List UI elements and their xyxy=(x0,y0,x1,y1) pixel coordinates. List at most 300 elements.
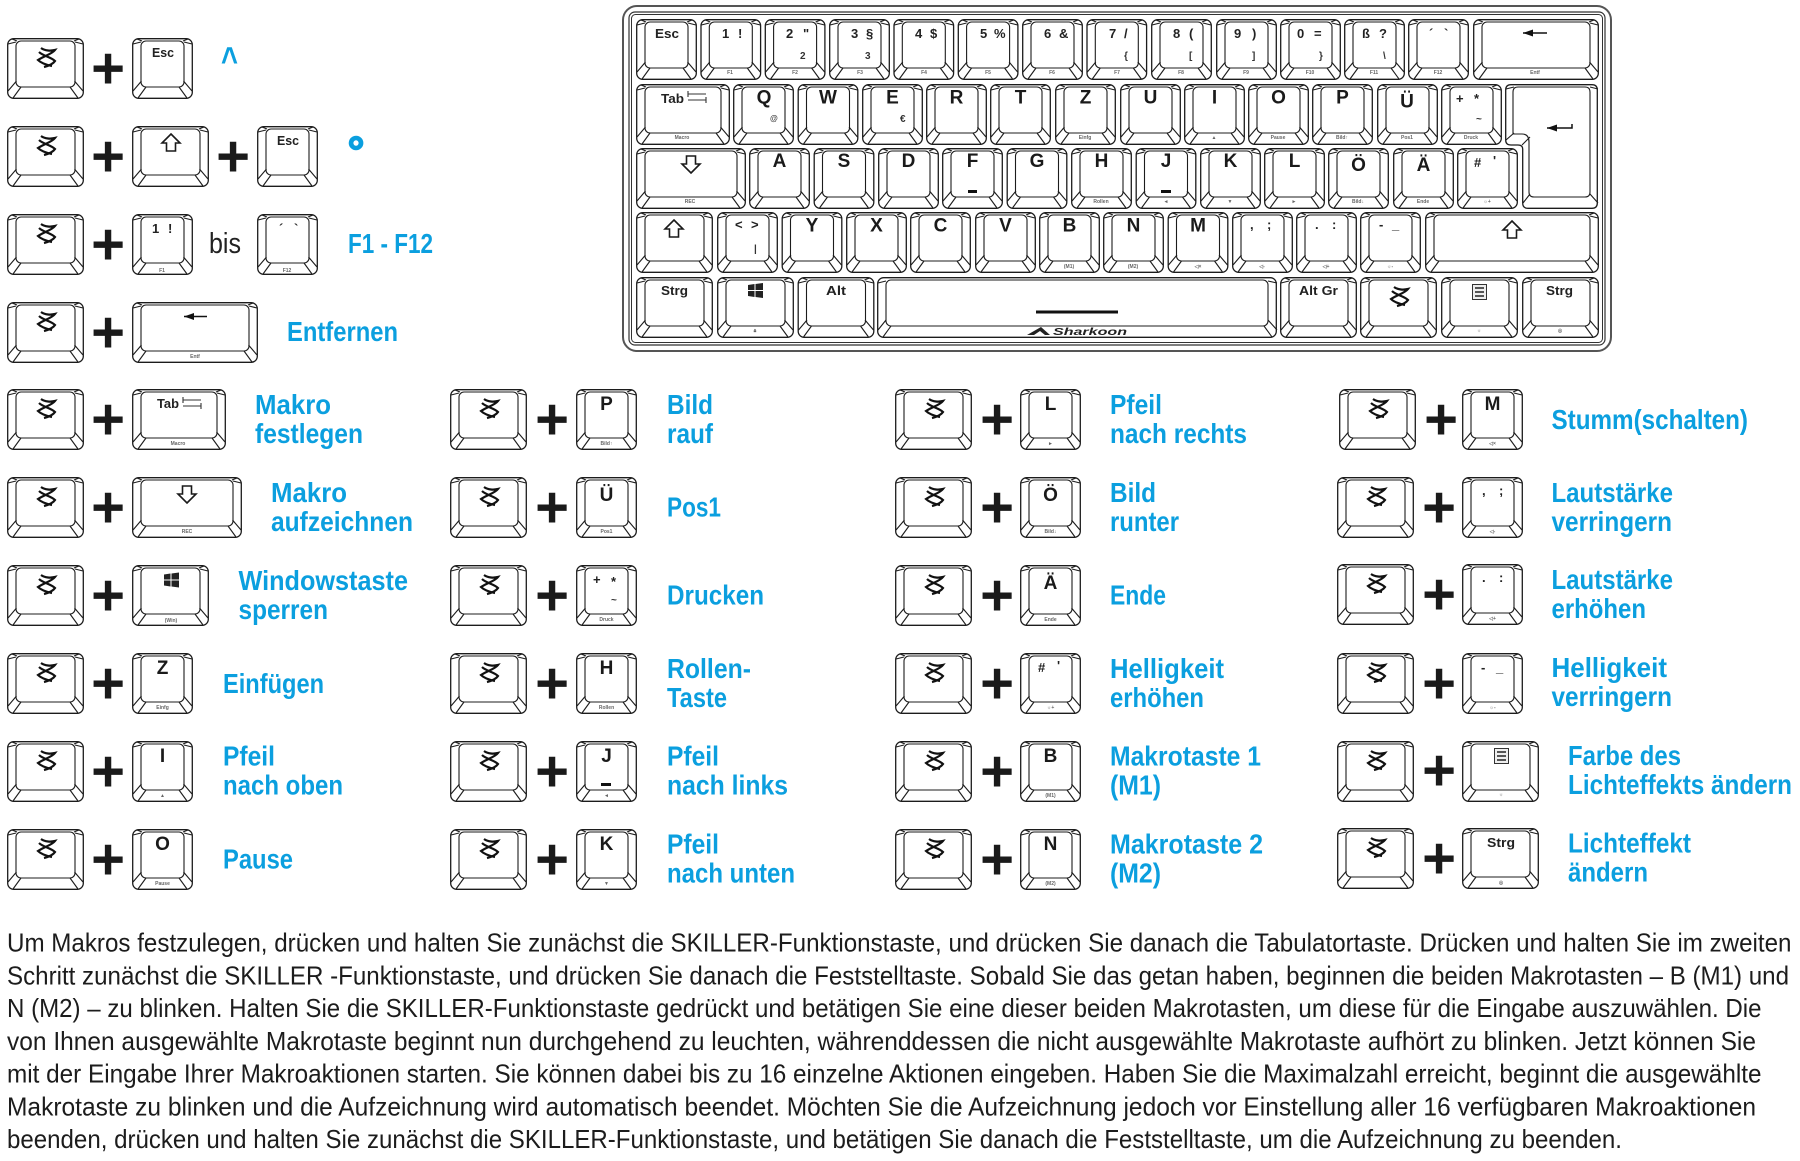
label: Windowstaste sperren: Windowstaste xyxy=(238,565,408,596)
shortcut: Einfügen xyxy=(8,651,324,716)
label: Pause: Pause xyxy=(223,844,293,874)
label: Helligkeit verringern xyxy=(1552,652,1672,712)
shortcut: Bild rauf: + xyxy=(535,387,569,452)
shortcut: F1 to F12: + xyxy=(91,212,125,277)
keyboard enter key xyxy=(1506,85,1598,208)
shortcut: Farbe des Lichteffekts ändern xyxy=(1338,738,1792,803)
keyboard row 3: ASDF keys: D xyxy=(902,151,915,172)
keyboard row 4: shift row: : xyxy=(1332,217,1336,232)
shortcut: Makrotaste 1: B xyxy=(1044,746,1057,767)
label: Lautstärke verringern xyxy=(1552,477,1673,537)
keyboard row 1: number keys xyxy=(637,20,1598,79)
shortcut: Lautstärke erhöhen: : xyxy=(1499,570,1503,585)
keyboard row 4: shift row: ◁- xyxy=(1258,264,1265,270)
keyboard row 3: ASDF keys: ☼+ xyxy=(1483,199,1491,205)
keyboard diagram xyxy=(623,6,1611,351)
shortcut: degree sign: Esc xyxy=(277,133,299,148)
keyboard row 1: number keys: 7 xyxy=(1109,26,1116,41)
keyboard row 1: number keys: = xyxy=(1314,26,1322,41)
label: Bild rauf xyxy=(667,389,714,449)
keyboard row 2: QWERTZ keys: R xyxy=(950,88,964,108)
shortcut: Helligkeit erhöhen: ☼+ xyxy=(1047,705,1054,711)
keyboard row 2: QWERTZ keys: € xyxy=(900,114,906,125)
shortcut: Ende: Ä xyxy=(1044,573,1058,594)
shortcut: F1 to F12 xyxy=(8,212,433,277)
shortcut: Pfeil nach links: ◄ xyxy=(604,793,609,799)
keyboard row 1: number keys: 0 xyxy=(1297,26,1304,41)
keyboard row 3: ASDF keys: ◄ xyxy=(1164,199,1168,205)
keyboard row 3: ASDF keys: G xyxy=(1030,151,1044,172)
shortcut: Farbe des Lichteffekts ändern: + xyxy=(1422,738,1456,803)
keyboard row 4: shift row: (M1) xyxy=(1064,264,1074,270)
label: Pfeil nach links: Pfeil xyxy=(667,740,719,772)
shortcut: caret: Esc xyxy=(152,45,174,60)
label: Lautstärke verringern: Lautstärke xyxy=(1552,477,1673,508)
label: Pfeil nach unten xyxy=(667,828,795,888)
keyboard row 1: number keys: ! xyxy=(738,26,742,41)
label: Rollen-Taste xyxy=(667,653,751,713)
shortcut: Lautstärke verringern: ◁- xyxy=(1489,529,1496,535)
label: Helligkeit erhöhen xyxy=(1110,653,1224,713)
label: Entfernen: Entfernen xyxy=(287,316,398,347)
shortcut: Makrotaste 2: + xyxy=(980,827,1014,892)
keyboard row 4: shift row: V xyxy=(999,216,1012,236)
shortcut: caret: + xyxy=(91,36,125,101)
Sharkoon logo xyxy=(1027,327,1127,338)
shortcut: Makro festlegen: Tab xyxy=(157,396,179,411)
label: Rollen-Taste: Rollen- xyxy=(667,653,751,684)
keyboard row 1: number keys: { xyxy=(1124,51,1128,62)
keyboard row 4: shift row: . xyxy=(1315,217,1319,232)
label: Pfeil nach oben: nach oben xyxy=(223,770,343,800)
label: Helligkeit verringern: verringern xyxy=(1552,681,1672,712)
shortcut: Drucken: Druck xyxy=(599,617,614,623)
keyboard row 2: QWERTZ keys: ▲ xyxy=(1212,135,1216,141)
shortcut: Ende: Ende xyxy=(1044,617,1057,623)
keyboard row 4: shift row: (M2) xyxy=(1128,264,1138,270)
shortcut: Pfeil nach rechts: + xyxy=(980,387,1014,452)
shortcut: Entfernen: + xyxy=(91,300,125,365)
label: Pfeil nach unten: Pfeil xyxy=(667,828,719,860)
keyboard row 3: ASDF keys: L xyxy=(1289,151,1301,172)
keyboard row 1: number keys: ? xyxy=(1379,26,1387,41)
shortcut: Einfügen: Einfg xyxy=(156,705,169,711)
keyboard row 2: QWERTZ keys: @ xyxy=(770,114,778,123)
shortcut: Pos1: + xyxy=(535,475,569,540)
label: Bild rauf: rauf xyxy=(667,418,714,449)
keyboard row 2: QWERTZ keys: Macro xyxy=(675,135,689,141)
shortcut: Pause: Pause xyxy=(155,881,170,887)
keyboard row 4: shift row: M xyxy=(1190,216,1206,236)
shortcut: Makrotaste 2 xyxy=(896,827,1263,892)
shortcut: Drucken: ~ xyxy=(611,595,617,606)
shortcut: Windowstaste sperren xyxy=(8,563,408,628)
label: Pfeil nach rechts xyxy=(1110,389,1247,449)
label: Ende: Ende xyxy=(1110,580,1166,610)
keyboard row 2: QWERTZ keys: + xyxy=(1456,91,1464,106)
keyboard row 1: number keys: F7 xyxy=(1114,70,1120,76)
keyboard row 3: ASDF keys: J xyxy=(1161,151,1171,172)
keyboard row 3: ASDF keys xyxy=(637,149,1517,208)
shortcut: Makro aufzeichnen: + xyxy=(91,475,125,540)
shortcut: Lautstärke erhöhen: ◁+ xyxy=(1488,616,1496,622)
label: Makrotaste 1 (M1): Makrotaste 1 xyxy=(1110,740,1261,772)
keyboard row 1: number keys: [ xyxy=(1189,51,1193,62)
shortcut: Makro aufzeichnen: REC xyxy=(182,529,193,535)
label: Helligkeit erhöhen: Helligkeit xyxy=(1110,653,1224,684)
keyboard row 1: number keys: Esc xyxy=(655,26,679,41)
keyboard row 1: number keys: 6 xyxy=(1044,26,1051,41)
shortcut: Helligkeit verringern: ☼- xyxy=(1489,705,1496,711)
keyboard row 2: QWERTZ keys: E xyxy=(886,88,899,108)
keyboard row 1: number keys: 2 xyxy=(800,51,806,62)
label: Lichteffekt ändern xyxy=(1568,828,1691,888)
keyboard row 4: shift row xyxy=(637,213,1598,272)
keyboard row 1: number keys: F3 xyxy=(857,70,863,76)
shortcut: Ende xyxy=(896,563,1166,628)
keyboard row 3: ASDF keys: Rollen xyxy=(1093,199,1109,205)
shortcut: Lautstärke erhöhen: + xyxy=(1422,562,1456,627)
keyboard row 4: shift row: < xyxy=(735,217,743,232)
keyboard row 4: shift row: ☼- xyxy=(1387,264,1393,270)
shortcut: Makrotaste 2: (M2) xyxy=(1045,881,1056,887)
shortcut: Pfeil nach links: J xyxy=(601,746,612,767)
label: Makro festlegen: Makro xyxy=(255,389,331,420)
keyboard row 1: number keys: ) xyxy=(1252,26,1256,41)
keyboard row 1: number keys: ´ xyxy=(1429,26,1433,41)
shortcut: Pfeil nach oben: ▲ xyxy=(160,793,165,799)
keyboard row 1: number keys: ` xyxy=(1444,26,1448,41)
shortcut: Helligkeit erhöhen: ' xyxy=(1057,658,1060,673)
keyboard row 3: ASDF keys: Ende xyxy=(1417,199,1429,205)
label: Bild runter: runter xyxy=(1110,506,1179,537)
shortcut: Farbe des Lichteffekts ändern: ☼ xyxy=(1499,792,1503,798)
shortcut: Rollen-Taste xyxy=(451,651,751,716)
keyboard row 2: QWERTZ keys: Bild↑ xyxy=(1336,135,1348,141)
shortcut: Pfeil nach rechts xyxy=(896,387,1247,452)
keyboard row 4: shift row: , xyxy=(1250,217,1254,232)
label: Windowstaste sperren: sperren xyxy=(238,594,328,625)
shortcut: Makro festlegen: + xyxy=(91,387,125,452)
shortcut: Helligkeit verringern: - xyxy=(1481,660,1485,675)
label: Pfeil nach links xyxy=(667,740,788,800)
label: Drucken: Drucken xyxy=(667,580,764,610)
keyboard row 1: number keys: F2 xyxy=(792,70,798,76)
label: ^: ^ xyxy=(221,40,238,81)
keyboard row 1: number keys: } xyxy=(1319,51,1323,62)
keyboard row 4: shift row: C xyxy=(934,216,948,236)
keyboard row 3: ASDF keys: ' xyxy=(1493,153,1496,168)
shortcut: Pfeil nach unten: ▼ xyxy=(604,881,609,887)
shortcut: Pfeil nach links xyxy=(451,739,788,804)
keyboard row 3: ASDF keys: ▼ xyxy=(1228,199,1232,205)
shortcut: Rollen-Taste: + xyxy=(535,651,569,716)
shortcut: Pfeil nach links: + xyxy=(535,739,569,804)
keyboard row 2: QWERTZ keys: Druck xyxy=(1464,135,1478,141)
shortcut: Bild rauf: Bild↑ xyxy=(601,441,612,447)
keyboard row 2: QWERTZ keys: * xyxy=(1474,91,1480,106)
label: Lichteffekt ändern: ändern xyxy=(1568,856,1648,888)
keyboard row 3: ASDF keys: A xyxy=(773,151,787,172)
label: Lautstärke verringern: verringern xyxy=(1552,506,1672,537)
label: Makrotaste 2 (M2) xyxy=(1110,828,1263,888)
label: Pfeil nach rechts: Pfeil xyxy=(1110,389,1162,420)
label: F1 - F12: F1 - F12 xyxy=(348,228,433,259)
keyboard row 4: shift row: N xyxy=(1127,216,1140,236)
keyboard row 1: number keys: / xyxy=(1124,26,1128,41)
label: Pfeil nach rechts: nach rechts xyxy=(1110,418,1247,449)
shortcut: degree sign xyxy=(8,124,364,189)
shortcut: Pos1: Pos1 xyxy=(601,529,613,535)
label: Lichteffekt ändern: Lichteffekt xyxy=(1568,828,1691,858)
shortcut: Pause: O xyxy=(155,834,170,855)
label: Makrotaste 1 (M1) xyxy=(1110,740,1261,800)
label: Einfügen: Einfügen xyxy=(223,668,324,699)
keyboard row 1: number keys: 3 xyxy=(851,26,858,41)
shortcut: Einfügen: + xyxy=(91,651,125,716)
keyboard row 4: shift row: Y xyxy=(806,216,819,236)
keyboard row 1: number keys: F12 xyxy=(1434,70,1443,76)
label: Lautstärke erhöhen: erhöhen xyxy=(1552,593,1646,624)
shortcut: Stumm(schalten): ◁× xyxy=(1488,441,1496,447)
keyboard row 2: QWERTZ keys: ~ xyxy=(1476,114,1482,125)
keyboard row 2: QWERTZ keys: Ü xyxy=(1400,92,1414,112)
instructions paragraph xyxy=(7,928,1792,1154)
shortcut: Makro aufzeichnen xyxy=(8,475,413,540)
shortcut: Makrotaste 1 xyxy=(896,739,1261,804)
keyboard row 2: QWERTZ keys: Q xyxy=(757,88,771,108)
shortcut: Lautstärke erhöhen xyxy=(1338,562,1673,627)
label: Makrotaste 2 (M2): Makrotaste 2 xyxy=(1110,828,1263,860)
keyboard row 1: number keys: F10 xyxy=(1306,70,1315,76)
keyboard row 2: QWERTZ keys: Z xyxy=(1080,88,1092,108)
shortcut: Pause: + xyxy=(91,827,125,892)
label: Makro aufzeichnen: aufzeichnen xyxy=(271,506,413,537)
keyboard row 1: number keys: F8 xyxy=(1178,70,1184,76)
keyboard row 1: number keys: ( xyxy=(1189,26,1194,41)
keyboard row 2: QWERTZ keys: W xyxy=(819,88,837,108)
shortcut: Makro festlegen: Macro xyxy=(171,441,185,447)
keyboard row 1: number keys: F4 xyxy=(921,70,927,76)
keyboard row 2: QWERTZ keys: P xyxy=(1336,88,1349,108)
label: Lautstärke erhöhen: Lautstärke xyxy=(1552,564,1673,595)
keyboard row 4: shift row: - xyxy=(1379,217,1383,232)
keyboard row 3: ASDF keys: S xyxy=(838,151,850,172)
shortcut: Pfeil nach oben: I xyxy=(160,746,165,767)
shortcut: Stumm(schalten) xyxy=(1340,387,1748,452)
label: degree: ° xyxy=(348,128,364,174)
label: Pfeil nach links: nach links xyxy=(667,770,788,800)
keyboard row 5: modifier keys and space bar: Alt Gr xyxy=(1299,283,1338,298)
shortcut: Helligkeit erhöhen: # xyxy=(1038,660,1046,675)
keyboard row 1: number keys: 1 xyxy=(722,26,729,41)
shortcut: Lichteffekt ändern: + xyxy=(1422,826,1456,891)
keyboard row 4: shift row: B xyxy=(1063,216,1076,236)
keyboard row 2: QWERTZ keys: U xyxy=(1144,88,1157,108)
keyboard row 5: modifier keys and space bar: Strg xyxy=(1546,283,1573,298)
label: Bild runter xyxy=(1110,477,1179,537)
keyboard row 2: QWERTZ keys: O xyxy=(1271,88,1286,108)
keyboard row 4: shift row: ◁× xyxy=(1194,264,1201,270)
keyboard row 3: ASDF keys: Ö xyxy=(1351,155,1366,176)
keyboard row 2: QWERTZ keys xyxy=(637,85,1501,144)
shortcut: Lichteffekt ändern: ◎ xyxy=(1499,880,1504,886)
label: Lautstärke erhöhen xyxy=(1552,564,1673,624)
keyboard row 3: ASDF keys: H xyxy=(1095,151,1108,172)
shortcut: Helligkeit verringern: _ xyxy=(1495,660,1504,675)
shortcut: Ende: + xyxy=(980,563,1014,628)
keyboard row 4: shift row: X xyxy=(870,216,883,236)
keyboard row 1: number keys: 8 xyxy=(1173,26,1180,41)
keyboard row 2: QWERTZ keys: Einfg xyxy=(1079,135,1091,141)
keyboard row 1: number keys: F5 xyxy=(985,70,991,76)
shortcut: Windowstaste sperren: (Win) xyxy=(165,618,178,624)
keyboard row 5: modifier keys and space bar: ☼ xyxy=(1477,328,1481,334)
shortcut: Lautstärke erhöhen: . xyxy=(1482,570,1486,585)
shortcut: degree sign: + xyxy=(91,124,125,189)
keyboard row 4: shift row: _ xyxy=(1391,217,1400,232)
shortcut: Bild rauf: P xyxy=(600,394,613,415)
shortcut: Pause xyxy=(8,827,293,892)
shortcut: Makrotaste 2: N xyxy=(1044,834,1057,855)
keyboard row 1: number keys: F9 xyxy=(1243,70,1249,76)
instructions paragraph: beenden, drücken und halten Sie zunächst die SKILLER-Funktionstaste, und betätigen Sie danach die Feststelltaste, um die Aufzeichnung zu beenden. xyxy=(7,1124,1622,1154)
label: Windowstaste sperren xyxy=(238,565,408,625)
shortcut: Drucken: + xyxy=(593,572,601,587)
shortcut: Lautstärke verringern: , xyxy=(1482,483,1486,498)
shortcut: Helligkeit verringern: + xyxy=(1422,651,1456,716)
shortcut: Rollen-Taste: H xyxy=(600,658,613,679)
keyboard row 1: number keys: 3 xyxy=(865,51,871,62)
shortcut: Pfeil nach unten: K xyxy=(600,834,614,855)
keyboard row 1: number keys: 4 xyxy=(915,26,923,41)
shortcut: caret xyxy=(8,36,238,101)
label: Makro aufzeichnen xyxy=(271,477,413,537)
keyboard row 1: number keys: $ xyxy=(930,26,938,41)
keyboard row 1: number keys: " xyxy=(803,26,809,41)
shortcut: Pos1: Ü xyxy=(600,485,613,506)
shortcut: Drucken xyxy=(451,563,764,628)
shortcut: Bild runter: + xyxy=(980,475,1014,540)
shortcut: F1 to F12: ` xyxy=(294,221,298,236)
label: Pfeil nach oben: Pfeil xyxy=(223,740,275,772)
shortcut: Bild runter: Ö xyxy=(1043,485,1058,506)
keyboard row 1: number keys: 5 xyxy=(980,26,987,41)
keyboard row 2: QWERTZ keys: Tab xyxy=(661,91,684,106)
label: Makro festlegen: festlegen xyxy=(255,418,363,449)
label: Bild runter: Bild xyxy=(1110,477,1156,508)
keyboard row 4: shift row: ◁+ xyxy=(1322,264,1329,270)
label: Pfeil nach oben xyxy=(223,740,343,800)
keyboard row 1: number keys: 9 xyxy=(1234,26,1241,41)
shortcut: Stumm(schalten): M xyxy=(1485,394,1500,415)
keyboard row 3: ASDF keys: # xyxy=(1474,155,1482,170)
keyboard row 5: modifier keys and space bar: Strg xyxy=(661,283,688,298)
keyboard row 4: shift row: > xyxy=(751,217,759,232)
keyboard row 1: number keys: F1 xyxy=(727,70,733,76)
shortcut: Bild runter: Bild↓ xyxy=(1045,529,1056,535)
label: Pfeil nach unten: nach unten xyxy=(667,858,795,888)
label: Bild rauf: Bild xyxy=(667,389,713,420)
keyboard row 5: modifier keys and space bar xyxy=(637,278,1598,338)
shortcut: Bild runter xyxy=(896,475,1179,540)
shortcut: Drucken: * xyxy=(611,574,617,589)
shortcut: Pfeil nach unten: + xyxy=(535,827,569,892)
shortcut: F1 to F12: F1 xyxy=(159,268,165,274)
shortcut: Lautstärke verringern: + xyxy=(1422,475,1456,540)
label: Helligkeit verringern: Helligkeit xyxy=(1552,652,1667,683)
label: Helligkeit erhöhen: erhöhen xyxy=(1110,682,1204,713)
label: Makro festlegen xyxy=(255,389,363,449)
keyboard row 1: number keys: & xyxy=(1059,26,1068,41)
shortcut: Lichteffekt ändern xyxy=(1338,826,1691,891)
label: Farbe des Lichteffekts ändern xyxy=(1568,740,1792,800)
keyboard row 1: number keys: % xyxy=(994,26,1006,41)
shortcut: Helligkeit erhöhen: + xyxy=(980,651,1014,716)
keyboard row 3: ASDF keys: REC xyxy=(685,199,696,205)
label: Farbe des Lichteffekts ändern: Farbe des xyxy=(1568,740,1681,771)
keyboard row 1: number keys: F6 xyxy=(1049,70,1055,76)
shortcut: Bild rauf xyxy=(451,387,714,452)
shortcut: Pfeil nach rechts: ► xyxy=(1048,441,1053,447)
shortcut: Lautstärke verringern: ; xyxy=(1499,483,1503,498)
shortcut: Entfernen: Entf xyxy=(190,354,200,360)
Sharkoon logo: Sharkoon xyxy=(1053,327,1127,338)
keyboard row 5: modifier keys and space bar: ◎ xyxy=(1558,328,1563,334)
keyboard row 3: ASDF keys: Bild↓ xyxy=(1352,199,1364,205)
keyboard row 1: number keys: \ xyxy=(1383,51,1386,62)
keyboard frame xyxy=(623,6,1611,351)
shortcut: Pfeil nach oben: + xyxy=(91,739,125,804)
shortcut: Drucken: + xyxy=(535,563,569,628)
shortcut: degree sign: + xyxy=(216,124,250,189)
keyboard row 3: ASDF keys: ► xyxy=(1292,199,1296,205)
shortcut: Pfeil nach unten xyxy=(451,827,795,892)
shortcut: Stumm(schalten): + xyxy=(1424,387,1458,452)
shortcut: Einfügen: Z xyxy=(157,658,169,679)
keyboard row 4: shift row: | xyxy=(754,244,757,255)
keyboard row 1: number keys: § xyxy=(866,26,873,41)
shortcut: Pfeil nach oben xyxy=(8,739,343,804)
shortcut: Helligkeit verringern xyxy=(1338,651,1672,716)
shortcut: Rollen-Taste: Rollen xyxy=(599,705,614,711)
keyboard row 3: ASDF keys: F xyxy=(967,151,978,172)
shortcut: F1 to F12: 1 xyxy=(152,221,159,236)
shortcut: Lautstärke verringern xyxy=(1338,475,1673,540)
shortcut: Pos1 xyxy=(451,475,721,540)
shortcut: Pfeil nach rechts: L xyxy=(1045,394,1057,415)
keyboard row 3: ASDF keys: Ä xyxy=(1417,155,1431,176)
keyboard row 1: number keys: ] xyxy=(1252,51,1255,62)
shortcut: F1 to F12: ´ xyxy=(279,221,283,236)
label: Makrotaste 1 (M1): (M1) xyxy=(1110,770,1161,800)
keyboard row 2: QWERTZ keys: I xyxy=(1212,88,1217,108)
connector: bis: bis xyxy=(209,228,241,260)
keyboard row 5: modifier keys and space bar: Alt xyxy=(826,283,847,298)
keyboard row 1: number keys: F11 xyxy=(1370,70,1378,76)
keyboard row 1: number keys: ß xyxy=(1362,26,1370,41)
keyboard row 3: ASDF keys: K xyxy=(1224,151,1238,172)
keyboard row 2: QWERTZ keys: Pos1 xyxy=(1401,135,1413,141)
label: Pos1: Pos1 xyxy=(667,492,721,522)
shortcut: Makrotaste 1: (M1) xyxy=(1045,793,1056,799)
label: Makrotaste 2 (M2): (M2) xyxy=(1110,858,1161,888)
shortcut: Entfernen xyxy=(8,300,398,365)
keyboard row 5: modifier keys and space bar: 🔒︎ xyxy=(754,328,757,334)
keyboard row 1: number keys: Entf xyxy=(1530,70,1540,76)
keyboard row 2: QWERTZ keys: T xyxy=(1015,88,1027,108)
shortcut: Lichteffekt ändern: Strg xyxy=(1487,835,1515,850)
